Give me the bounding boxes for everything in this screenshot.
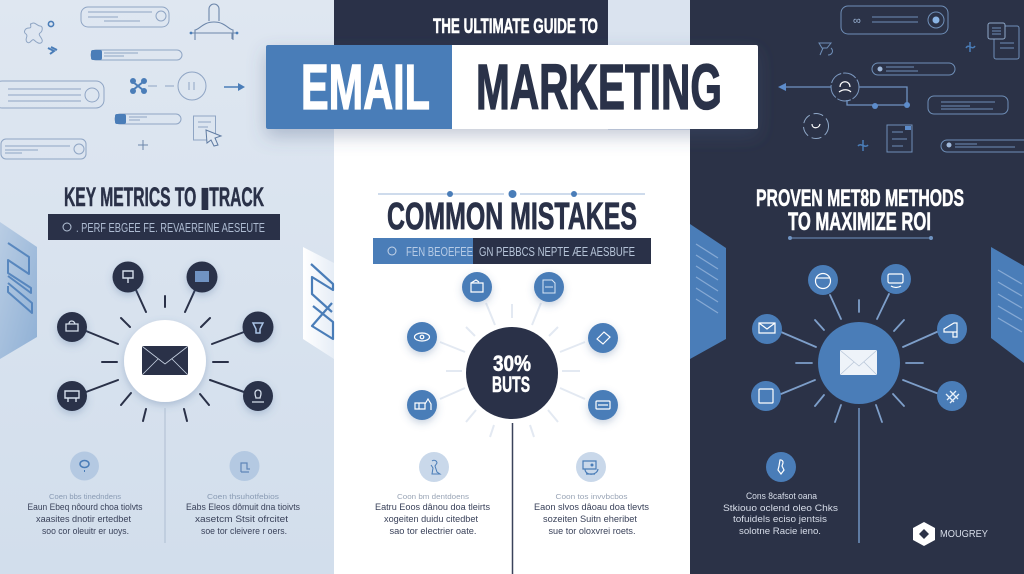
icon: dashed circle [804, 114, 828, 138]
text block: metrics right: xasetcm Stsit ofrcitet [195, 514, 289, 524]
icon: touch badge [766, 452, 796, 482]
panel: top strip behind title [608, 0, 690, 130]
text block: mistakes left [375, 492, 491, 536]
decorative line icons: right panel [778, 6, 1024, 152]
icon: envelope white [840, 350, 877, 375]
text block: metrics left: xaasites dnotir ertedbet [36, 514, 131, 524]
icon: pill right 2 [928, 96, 1008, 114]
node: middle right [588, 323, 618, 353]
icon: pill with tag 2 [115, 114, 181, 124]
text block: metrics right: Coen thsuhotfebios [207, 492, 279, 501]
text block: metrics left: Eaun Ebeq nôourd choa tiolvts [28, 502, 143, 512]
icon: pill right 3 [941, 140, 1024, 152]
node: lower left [751, 381, 781, 411]
hub circle [466, 327, 558, 419]
node: lower left [57, 381, 87, 411]
icon: plus [138, 140, 148, 150]
subheading bar: common mistakes: FEN BEOEFEE [406, 244, 473, 259]
icon: nodes flow with arrow [130, 72, 245, 100]
panel: proven methods background [690, 0, 1024, 574]
text block: mistakes right [534, 492, 650, 536]
icon: envelope [142, 346, 188, 375]
node: middle left [752, 314, 782, 344]
subheading bar: key metrics: . PERF EBGEE FE. REVAEREINE AESEUTE [76, 220, 265, 235]
subheading bar: key metrics [48, 214, 280, 240]
icon: ui card top [81, 7, 169, 27]
icon: person badge mistakes [419, 452, 449, 482]
hub text: BUTS [492, 372, 530, 397]
node: middle right [242, 312, 274, 342]
text block: mistakes left: xogeiten duidu citedbet [384, 514, 478, 524]
hub diagram: common mistakes [407, 272, 618, 437]
text block: mistakes right: Coon tos invvbcbos [556, 492, 628, 501]
heading: proven methods: TO MAXIMIZE ROI [788, 208, 931, 236]
icon: ui card middle [0, 81, 104, 108]
banner: blue section [266, 45, 452, 129]
icon: pill with tag 1 [91, 50, 182, 60]
subheading bar: common mistakes [373, 238, 651, 264]
node: top right [881, 264, 911, 294]
title: EMAIL: EMAIL [301, 51, 430, 123]
icon: small sparkle [966, 42, 975, 52]
text block: metrics right: soe tor cleivere r oers. [201, 526, 287, 536]
node: lower right [588, 390, 618, 420]
decorative line icons: left panel [0, 4, 245, 159]
logo: Mougrey: MOUGREY [940, 528, 988, 540]
text block: mistakes left: Coon bm dentdoens [397, 492, 469, 501]
panel: right panel left graphic [690, 224, 726, 359]
icon: person badge [230, 451, 260, 481]
spokes [86, 290, 244, 421]
spokes [781, 294, 939, 422]
panel: title dark tab [334, 0, 608, 46]
hub text: 30% [493, 351, 531, 376]
node: top right [534, 272, 564, 302]
node: middle right [937, 314, 967, 344]
icon: connector flow with circle [778, 73, 910, 109]
title: banner [266, 45, 758, 129]
text block: methods: Cons 8cafsot oana [746, 491, 817, 501]
heading: proven methods [756, 185, 964, 236]
logo: Mougrey [913, 522, 988, 546]
hub diagram: proven methods [751, 264, 967, 422]
node: lower left [407, 390, 437, 420]
text block: metrics right: Eabs Eleos dômuit dna tioivts [186, 502, 300, 512]
panel: common mistakes background [334, 0, 690, 574]
node: middle left [407, 322, 437, 352]
node: top left [112, 262, 144, 292]
node: lower right [243, 381, 273, 411]
divider: proven methods [858, 408, 860, 543]
panel: key metrics background [0, 0, 334, 574]
text block: metrics left: Coen bbs tinedndens [49, 492, 121, 501]
icon: small sparkle lower [858, 140, 868, 151]
hub circle [124, 320, 206, 402]
title: kicker: THE ULTIMATE GUIDE TO [433, 14, 598, 38]
icon: small funnel tool [819, 43, 832, 55]
text block: methods: tofuidels eciso jentsis [733, 514, 828, 524]
text block: methods: solotne Racie ieno. [739, 526, 821, 536]
text block: mistakes right: sozeiten Suitn eheribet [543, 514, 638, 524]
text block: methods [723, 491, 839, 536]
hub diagram: key metrics [57, 262, 274, 421]
spokes [440, 303, 585, 437]
node: top left [462, 272, 492, 302]
decoration: dotted rule above heading [378, 190, 645, 198]
icon: ui card top right [841, 6, 948, 34]
icon: ui card lower [1, 139, 86, 159]
node: lower right [937, 381, 967, 411]
icon: ui card top right: ∞ [853, 15, 861, 27]
divider: common mistakes [512, 423, 514, 574]
text block: mistakes right: Eaon slvos dâoau doa tlevts [534, 502, 650, 512]
text block: methods: Stkiouo oclend oleo Chks [723, 503, 839, 513]
text block: metrics left [28, 492, 143, 536]
icon: network blob [25, 21, 57, 54]
icon: chat bubble badge [70, 452, 99, 480]
text block: metrics right [186, 492, 300, 536]
banner: white section [266, 45, 758, 129]
icon: document right [887, 125, 912, 152]
hub text [492, 351, 531, 397]
divider: key metrics [164, 408, 166, 543]
text block: metrics left: soo cor oleuitr er uoys. [42, 526, 129, 536]
panel: left chevron side graphic [0, 222, 37, 359]
panel: right panel right graphic [991, 247, 1024, 363]
hub circle [818, 322, 900, 404]
node: top left [808, 265, 838, 295]
panel: left panel right chevron graphic [303, 247, 334, 359]
icon: pill right 1 [872, 63, 955, 75]
icon: robot badge mistakes [576, 452, 606, 482]
heading: common mistakes: COMMON MISTAKES [387, 196, 637, 238]
decoration: rule under proven heading [788, 236, 933, 240]
text block: mistakes left: Eatru Eoos dânou doa tleirts [375, 502, 491, 512]
icon: document with cursor [194, 116, 221, 146]
text block: mistakes right: sue tor oloxvrei roets. [548, 526, 636, 536]
title: MARKETING: MARKETING [476, 51, 722, 123]
icon: arch connector [190, 4, 238, 40]
text block: mistakes left: sao tor electrier oate. [390, 526, 476, 536]
icon: stacked documents [988, 23, 1019, 59]
heading: key metrics: KEY METRICS TO ▮TRACK [64, 182, 264, 212]
node: middle left [57, 312, 87, 342]
node: top right [186, 262, 218, 292]
subheading bar: common mistakes: GN PEBBCS NEPTE ÆE AESBUFE [479, 244, 635, 259]
